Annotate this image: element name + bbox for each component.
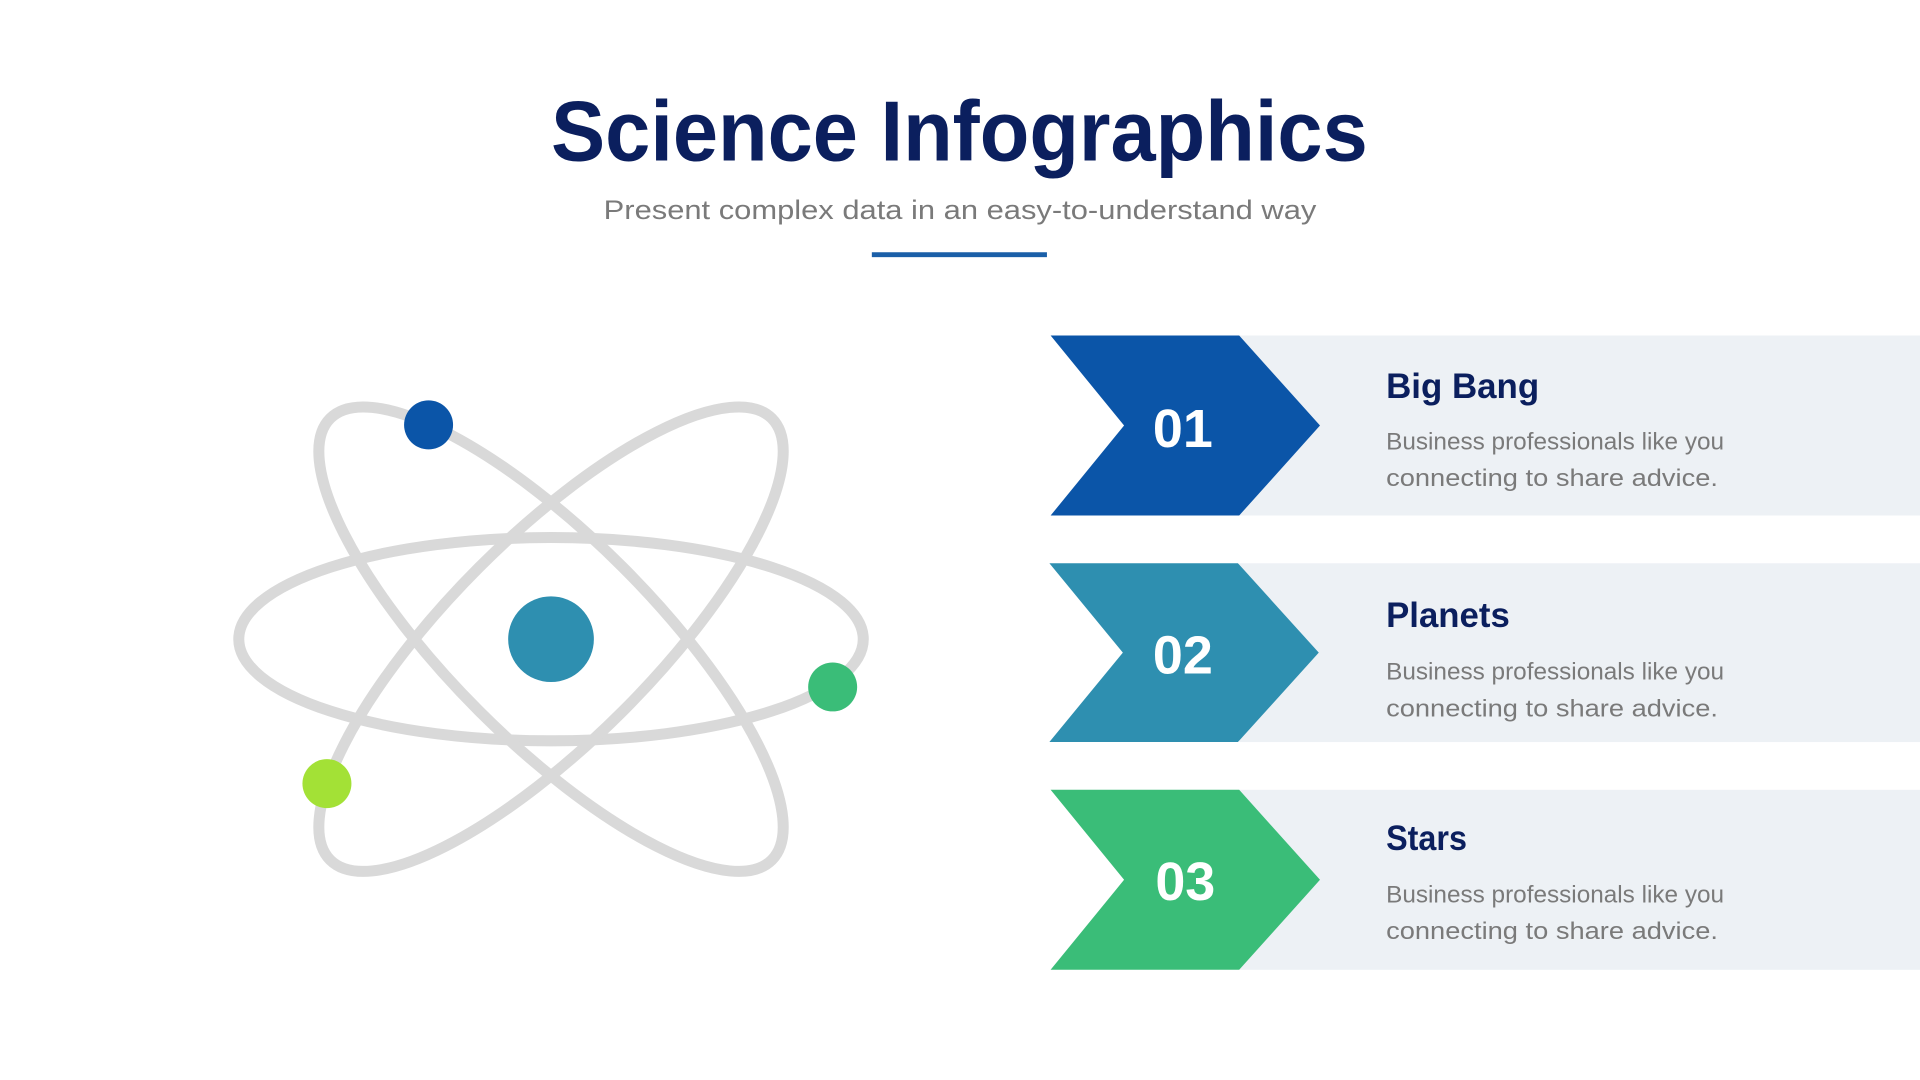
number 02: 02 [1153,625,1213,685]
panel background [1239,563,1920,742]
electron green [808,662,857,711]
panel background [1239,336,1920,516]
chevron 01 [1051,336,1320,516]
title underline [872,252,1047,257]
item 03: Stars: connecting to share advice. [1386,918,1718,945]
body: Business professionals like you [1386,428,1724,455]
chevron 03 [1051,790,1320,970]
heading: Planets [1386,595,1510,635]
nucleus [508,596,594,682]
orbit: horizontal [239,538,863,741]
body: Business professionals like you [1386,659,1724,686]
orbit: tilted right [258,347,844,932]
atom illustration [239,347,863,932]
number 01: 01 [1153,399,1213,459]
electron blue [404,400,453,449]
body: Business professionals like you [1386,881,1724,908]
item 03: Stars [1051,790,1920,970]
panel background [1239,790,1920,970]
item 01: Big Bang: connecting to share advice. [1386,465,1718,492]
title: Science Infographics [551,83,1368,179]
heading: Big Bang [1386,366,1539,406]
heading: Stars [1386,818,1467,858]
electron lime [302,759,351,808]
item 01: Big Bang [1051,336,1920,516]
subtitle: Present complex data in an easy-to-understand way [604,195,1317,225]
orbit: tilted left [258,347,844,932]
number 03: 03 [1155,852,1215,912]
item 02: Planets [1049,563,1920,742]
item 02: Planets: connecting to share advice. [1386,695,1718,722]
chevron 02 [1049,563,1319,742]
